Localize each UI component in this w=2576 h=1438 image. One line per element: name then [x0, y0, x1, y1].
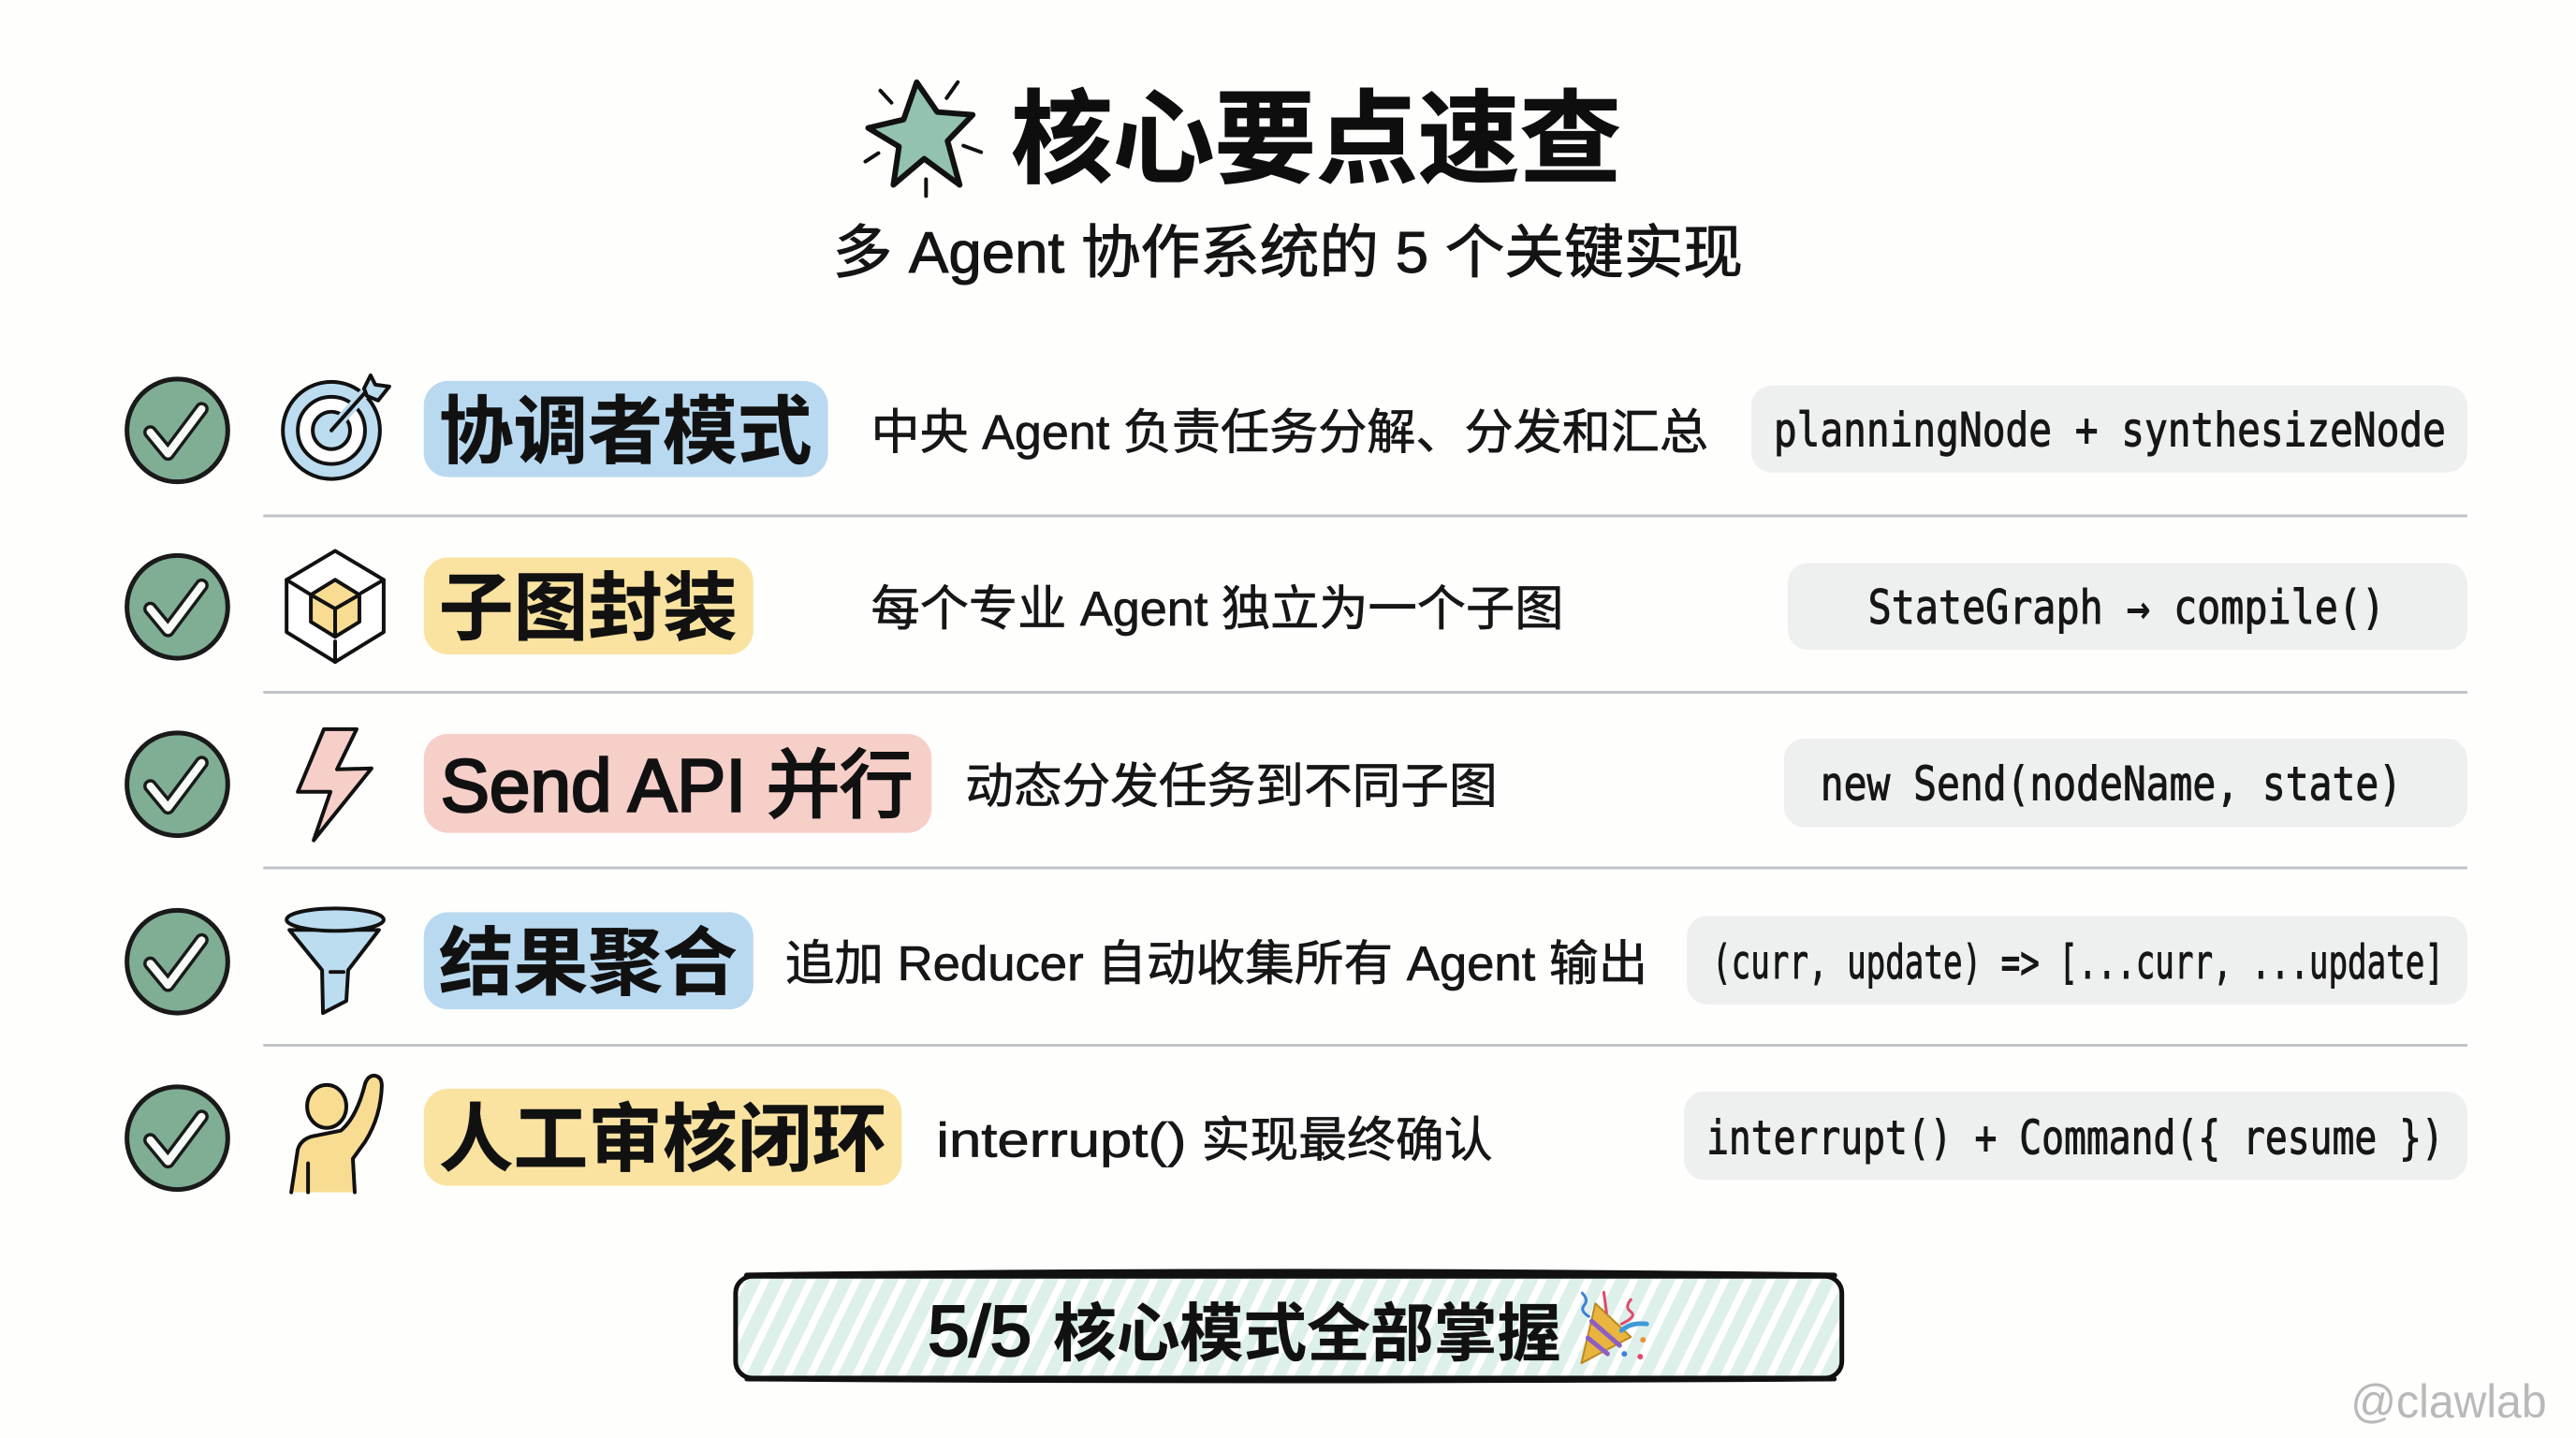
- divider 4: [263, 1044, 2467, 1047]
- code chip 1: [1751, 386, 2467, 473]
- description 4: 追加 Reducer 自动收集所有 Agent 输出: [785, 936, 1647, 990]
- icon: check circle 4: [127, 910, 227, 1013]
- icon: lightning bolt: [298, 729, 372, 841]
- row 4: result aggregation: [127, 908, 2467, 1013]
- code chip 1: planningNode + synthesizeNode: [1774, 404, 2446, 458]
- code chip 4: [1687, 916, 2467, 1005]
- watermark: @clawlab: [2350, 1375, 2547, 1428]
- code chip 2: StateGraph → compile(): [1868, 580, 2385, 635]
- description 2: 每个专业 Agent 独立为一个子图: [871, 581, 1563, 636]
- icon: check circle 5: [127, 1087, 227, 1190]
- divider 1: [263, 515, 2467, 518]
- footer banner: [736, 1271, 1842, 1381]
- icon: check circle 1: [127, 379, 227, 482]
- row 3: Send API: [127, 729, 2467, 841]
- label chip: 人工审核闭环: 人工审核闭环: [439, 1098, 886, 1181]
- title: 核心要点速查: [1011, 83, 1621, 197]
- row 1: coordinator pattern: [127, 375, 2467, 482]
- icon: person raising hand: [291, 1076, 382, 1193]
- icon: check circle 3: [127, 733, 227, 836]
- description 5: 实现最终确认: [1202, 1113, 1493, 1167]
- footer text: 核心模式全部掌握: [1053, 1299, 1560, 1370]
- description 1: 中央 Agent 负责任务分解、分发和汇总: [871, 405, 1708, 460]
- label chip: 结果聚合: 结果聚合: [439, 921, 738, 1005]
- footer text: 5/5: [928, 1292, 1032, 1372]
- code chip 3: new Send(nodeName, state): [1821, 757, 2402, 812]
- icon: star with sparkle rays: [865, 82, 981, 196]
- divider 2: [263, 691, 2467, 694]
- icon: target with arrow: [283, 375, 389, 479]
- label chip: 协调者模式: 协调者模式: [439, 390, 812, 474]
- description 5: interrupt(): [936, 1113, 1187, 1167]
- code chip 2: [1788, 563, 2467, 650]
- divider 3: [263, 866, 2467, 869]
- description 3: 动态分发任务到不同子图: [965, 759, 1498, 814]
- description 5: [936, 1113, 1493, 1167]
- code chip 3: [1784, 739, 2467, 828]
- row 5: human review: [127, 1076, 2467, 1193]
- label chip: Send API 并行: Send API 并行: [441, 744, 913, 828]
- icon: check circle 2: [127, 555, 227, 658]
- code chip 5: [1684, 1092, 2467, 1181]
- row 2: subgraph encapsulation: [127, 550, 2467, 662]
- icon: funnel: [286, 908, 384, 1013]
- label chip: 子图封装: 子图封装: [439, 566, 738, 650]
- icon: party popper: [1581, 1292, 1647, 1363]
- subtitle: 多 Agent 协作系统的 5 个关键实现: [833, 221, 1743, 286]
- icon: cube in hexagon: [286, 550, 384, 662]
